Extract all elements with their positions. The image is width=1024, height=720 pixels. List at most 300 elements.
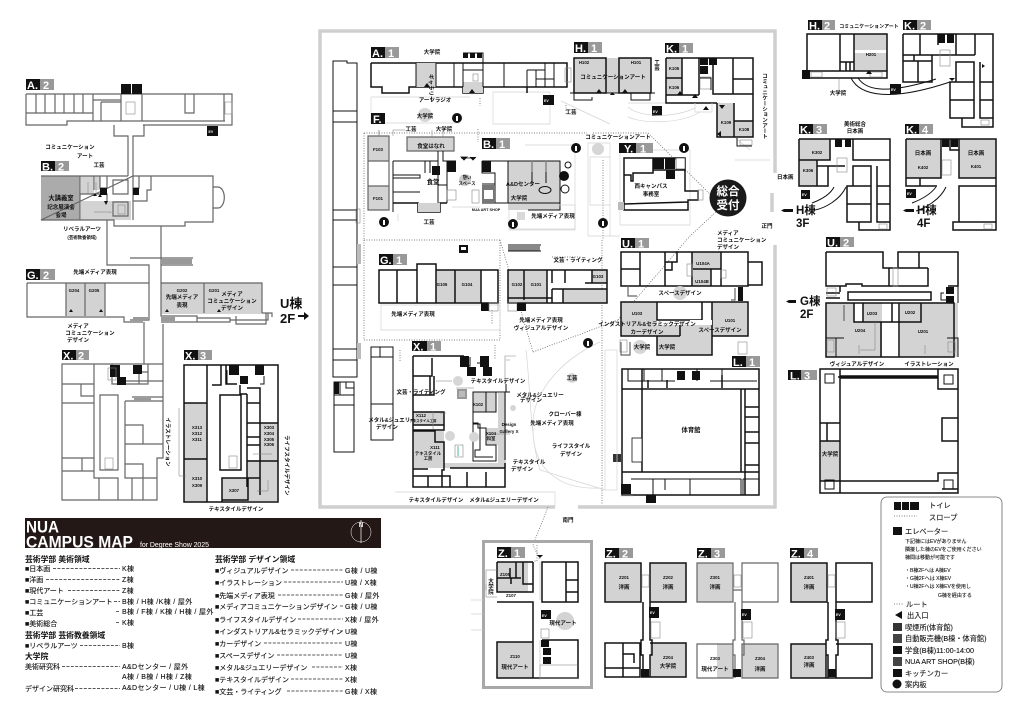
- room and department labels: EV: [542, 614, 547, 618]
- room and department labels: メディア: [67, 322, 89, 330]
- room and department labels: X307: [229, 488, 240, 493]
- floor tags: 1: [682, 44, 688, 56]
- room and department labels: ライフスタイルデザイン: [283, 435, 291, 496]
- room and department labels: H102: [579, 60, 590, 65]
- legend: design: ■先端メディア表現: [215, 591, 275, 600]
- panel: building K 4F: [906, 139, 996, 230]
- building U 1F: [620, 252, 762, 355]
- room and department labels: スペース: [458, 181, 476, 187]
- room and department labels: Z303: [710, 656, 721, 661]
- floor tags: 1: [396, 255, 402, 267]
- floor tags: K.: [904, 20, 915, 32]
- floor tags: 2: [824, 20, 830, 32]
- room and department labels: A&Dセンター: [506, 180, 540, 188]
- floor tags: Z.: [606, 548, 616, 560]
- room and department labels: X304: [264, 431, 275, 436]
- room and department labels: G205: [89, 288, 100, 293]
- room and department labels: イラストレーション: [904, 361, 954, 368]
- room and department labels: U204: [855, 328, 866, 333]
- room and department labels: G201: [209, 288, 220, 293]
- room and department labels: 3F: [796, 218, 809, 230]
- room and department labels: Z202: [663, 575, 674, 580]
- room and department labels: 洋画: [662, 583, 674, 591]
- room and department labels: G105: [437, 282, 448, 287]
- room and department labels: メディア: [221, 290, 243, 298]
- room and department labels: 体育館: [682, 425, 701, 434]
- panel: building H 2F: [802, 34, 887, 94]
- floor tags: 1: [640, 144, 646, 156]
- floor tags: X.: [185, 350, 195, 362]
- floor tags: K.: [906, 124, 917, 136]
- panel: building Z 1F frame: [471, 542, 592, 688]
- room and department labels: Z201: [619, 575, 630, 580]
- reception circle: [710, 180, 746, 216]
- room and department labels: テキスタイルデザイン: [409, 496, 464, 504]
- room and department labels: 会場: [55, 211, 67, 219]
- room and department labels: メディア: [717, 229, 739, 237]
- legend: design: G棟 / U棟: [345, 566, 378, 575]
- legend box: map key: 喫煙所(体育館): [905, 623, 953, 632]
- room and department labels: コミュニケーション: [45, 143, 95, 151]
- room and department labels: H201: [866, 52, 877, 57]
- room and department labels: テキスタイル: [415, 450, 442, 457]
- room and department labels: 洋画: [754, 665, 766, 673]
- legend: fine arts: Z棟: [122, 575, 134, 584]
- room and department labels: メタル&ジュエリーデザイン: [469, 496, 539, 504]
- legend: design: X棟: [345, 663, 357, 672]
- legend: design: ■テキスタイルデザイン: [215, 675, 289, 684]
- room and department labels: 記念展演会: [47, 203, 75, 211]
- room and department labels: 日本画: [847, 127, 864, 135]
- legend box: map key: 隣接した棟のEVをご使用ください: [905, 546, 982, 553]
- legend box: map key: ・B棟2Fへは A棟EV: [905, 567, 951, 574]
- room and department labels: Z204: [663, 655, 674, 660]
- room and department labels: U201: [918, 329, 929, 334]
- room and department labels: デザイン: [67, 336, 89, 344]
- room and department labels: X313: [192, 425, 203, 430]
- room and department labels: 表現: [176, 301, 188, 309]
- legend: fine arts: B棟 / F棟 / K棟 / H棟 / 屋外: [122, 607, 214, 616]
- room and department labels: Gallery X: [499, 429, 519, 434]
- floor tags: X.: [413, 342, 423, 354]
- room and department labels: ヴィジュアルデザイン: [514, 324, 569, 332]
- floor tags: H.: [575, 43, 586, 55]
- room and department labels: Design: [502, 422, 517, 427]
- legend: fine arts: K棟: [122, 564, 134, 573]
- room and department labels: Z107: [506, 593, 517, 598]
- legend: graduate school: [25, 651, 205, 693]
- legend box: map key: 案内板: [905, 680, 927, 689]
- room and department labels: デザイン: [511, 465, 533, 473]
- room and department labels: インダストリアル&セラミックデザイン: [598, 320, 696, 328]
- reception circle: 総合: [716, 184, 740, 198]
- room and department labels: コミュニケーションアート: [761, 73, 768, 139]
- legend: design: ■イラストレーション: [215, 579, 282, 587]
- room and department labels: EV: [653, 110, 658, 114]
- room and department labels: 大講義室: [48, 193, 74, 202]
- room and department labels: EV: [742, 613, 747, 617]
- building K 1F: [666, 58, 753, 146]
- room and department labels: 大学院: [424, 48, 441, 56]
- room and department labels: 工芸: [566, 374, 578, 382]
- room and department labels: 現代アート: [501, 664, 529, 671]
- room and department labels: 先端メディア表現: [530, 419, 574, 427]
- room and department labels: アーツラジオ: [419, 97, 451, 104]
- room and department labels: 先端メディア表現: [531, 212, 575, 220]
- room and department labels: 正門: [761, 223, 773, 230]
- panel: building K 3F: [799, 139, 890, 230]
- room and department labels: メタル&ジュエリー: [516, 391, 564, 399]
- floor tags: G.: [27, 270, 39, 282]
- panel: building X 2F: [62, 364, 163, 500]
- room and department labels: コミュニケーション: [717, 236, 767, 244]
- floor tags: 1: [749, 357, 755, 369]
- room and department labels: X303: [264, 425, 275, 430]
- panel: building L 3F: [820, 369, 958, 493]
- room and department labels: テキスタイルデザイン: [471, 377, 526, 385]
- room and department labels: 洋画: [803, 583, 815, 591]
- legend box: map key: 出入口: [907, 611, 929, 620]
- room and department labels: EV: [907, 192, 912, 196]
- floor tags: 2: [43, 270, 49, 282]
- room and department labels: スペースデザイン: [658, 289, 702, 297]
- floor tags: 1: [499, 139, 505, 151]
- floor tags: 2: [920, 20, 926, 32]
- legend: design: U棟 / X棟: [345, 578, 377, 587]
- legend box: map key: 自動販売機(B棟・体育館): [905, 634, 986, 643]
- legend: liberal arts: [25, 630, 134, 650]
- room and department labels: 食堂: [427, 177, 439, 186]
- room and department labels: U101: [725, 318, 736, 323]
- floor tags: 4: [807, 548, 814, 560]
- room and department labels: 先端メディア表現: [519, 316, 563, 324]
- room and department labels: X112: [416, 413, 427, 418]
- legend: graduate school: デザイン研究科: [25, 684, 74, 693]
- room and department labels: Z304: [755, 656, 766, 661]
- room and department labels: X104: [486, 431, 497, 436]
- room and department labels: 南門: [562, 516, 574, 524]
- room and department labels: 先端メディア: [166, 293, 199, 301]
- room and department labels: 文芸・ライティング: [553, 256, 603, 264]
- map title bar: NUA: [26, 518, 59, 536]
- kitchen car icon: [459, 245, 468, 253]
- floor tags: 3: [804, 370, 810, 382]
- gray area circles: [418, 108, 687, 442]
- room and department labels: デザイン: [221, 304, 243, 312]
- room and department labels: 4F: [917, 218, 930, 230]
- legend: liberal arts: ■リベラルアーツ: [25, 642, 78, 650]
- map title bar: N: [359, 523, 363, 529]
- legend: graduate school: 美術研究科: [25, 662, 60, 671]
- legend: design: ■カーデザイン: [215, 639, 261, 648]
- room and department labels: 工芸: [405, 125, 417, 133]
- room and department labels: K402: [918, 165, 929, 170]
- room and department labels: U103: [632, 311, 643, 316]
- room and department labels: 現代アート: [701, 666, 729, 673]
- panel: long west building: [333, 61, 393, 452]
- legend box: map key: ・G棟2Fへは X棟EV: [905, 575, 952, 582]
- room and department labels: カーデザイン: [630, 328, 664, 336]
- floor tags: U.: [827, 238, 838, 250]
- room and department labels: 2F: [280, 311, 295, 326]
- legend box: map key: スロープ: [929, 513, 958, 522]
- building X 1F: [413, 356, 516, 487]
- room and department labels: デザイン: [520, 396, 543, 404]
- room and department labels: 大学院: [417, 112, 434, 120]
- room and department labels: 和室: [487, 435, 496, 442]
- building B 1F: [393, 151, 575, 229]
- room and department labels: 工芸: [653, 59, 660, 72]
- panel: building B 2F: [41, 176, 224, 283]
- legend: design: ■文芸・ライティング: [215, 687, 282, 696]
- room and department labels: Z110: [510, 654, 520, 659]
- room and department labels: コミュニケーション: [207, 297, 257, 305]
- room and department labels: メタル&ジュエリー: [368, 416, 416, 424]
- room and department labels: NUA ART SHOP: [472, 208, 501, 212]
- room and department labels: Z403: [804, 655, 815, 660]
- floor tags: 1: [388, 48, 394, 60]
- info board icons: [379, 113, 689, 348]
- room and department labels: X111: [430, 445, 440, 450]
- room and department labels: 洋画: [709, 583, 721, 591]
- legend: fine arts: Z棟: [122, 586, 134, 595]
- room and department labels: リベラルアーツ: [63, 226, 102, 233]
- legend box: map key: G棟を経由する: [938, 592, 972, 599]
- legend: graduate school: A&Dセンター / 屋外: [122, 662, 188, 671]
- panel: building Z 4F: [791, 563, 872, 678]
- room and department labels: イラストレーション: [164, 417, 171, 467]
- floor tags: Y.: [624, 144, 633, 156]
- floor tags: [26, 20, 933, 560]
- room and department labels: (芸術教養領域): [67, 234, 97, 241]
- panel: building U 2F: [826, 252, 958, 357]
- legend: fine arts: ■工芸: [25, 608, 43, 617]
- room and department labels: U104A: [696, 261, 711, 266]
- floor tags: 3: [714, 548, 720, 560]
- legend: design: ■メタル&ジュエリーデザイン: [215, 663, 307, 672]
- floor tags: 2: [43, 80, 49, 92]
- floor tags: H.: [809, 20, 820, 32]
- room and department labels: F101: [373, 196, 384, 201]
- building G 1F: [379, 245, 607, 311]
- legend: design: X棟: [345, 675, 357, 684]
- room and department labels: 日本画: [915, 149, 932, 157]
- room and department labels: H101: [631, 60, 642, 65]
- legend: design: ■ライフスタイルデザイン: [215, 615, 296, 624]
- room and department labels: 2F: [800, 309, 813, 321]
- legend: fine arts: 芸術学部 美術領域: [25, 554, 90, 564]
- room and department labels: U203: [867, 311, 878, 316]
- room and department labels: G202: [177, 288, 188, 293]
- room and department labels: 大学院: [822, 450, 839, 458]
- room and department labels: 大学院: [487, 577, 494, 596]
- room and department labels: K401: [971, 164, 982, 169]
- panel: building K 2F: [903, 34, 993, 127]
- legend box: map key: 棟間は移動が可能です: [905, 554, 955, 561]
- room and department labels: 大学院: [634, 343, 651, 351]
- room and department labels: X311: [192, 437, 203, 442]
- legend: fine arts: ■現代アート: [25, 586, 64, 595]
- room and department labels: F103: [373, 147, 384, 152]
- legend: fine arts: ■洋画: [25, 575, 43, 584]
- legend: graduate school: 大学院: [25, 651, 49, 661]
- room and department labels: 憩い: [463, 174, 472, 180]
- room and department labels: Z105: [500, 572, 511, 577]
- legend: fine arts: ■美術総合: [25, 619, 57, 628]
- legend box: map key: トイレ: [929, 501, 951, 510]
- room and department labels: ライフスタイル: [552, 442, 591, 450]
- floor tags: B.: [483, 139, 494, 151]
- floor tags: 2: [622, 548, 628, 560]
- floor tags: 1: [638, 238, 644, 250]
- room and department labels: テキスタイル工房: [409, 418, 437, 423]
- room and department labels: EV: [802, 193, 807, 197]
- room and department labels: 事務室: [643, 190, 660, 198]
- room and department labels: 美術総合: [844, 120, 866, 128]
- room and department labels: G204: [69, 288, 80, 293]
- room and department labels: デザイン: [560, 450, 582, 458]
- room and department labels: コミュニケーションアート: [585, 133, 651, 141]
- building H 1F: [570, 58, 655, 100]
- panel: building Z 2F: [605, 563, 686, 677]
- room and department labels: U棟: [280, 296, 302, 311]
- building F and annex: [368, 130, 454, 210]
- room and department labels: G104: [462, 282, 473, 287]
- room and department labels: K306: [803, 168, 814, 173]
- floor tags: U.: [622, 238, 633, 250]
- panel: building A 2F: [26, 84, 232, 176]
- room and department labels: G棟: [800, 294, 821, 308]
- legend: design: X棟 / 屋外: [345, 615, 379, 624]
- room and department labels: U104B: [695, 279, 709, 284]
- floor tags: 2: [78, 350, 84, 362]
- legend: fine arts: B棟 / H棟 /K棟 / 屋外: [122, 597, 193, 606]
- floor tags: B.: [42, 162, 53, 174]
- room and department labels: テキスタイルデザイン: [209, 505, 264, 513]
- legend: design: G棟 / U棟: [345, 602, 378, 611]
- floor tags: K.: [666, 44, 677, 56]
- building L 1F gym: [605, 350, 759, 503]
- room and department labels: 日本画: [968, 149, 985, 157]
- room and department labels: EV: [208, 130, 214, 134]
- room and department labels: デザイン: [717, 243, 740, 251]
- floor tags: 3: [816, 124, 822, 136]
- room and department labels: デザイン: [376, 423, 399, 431]
- legend: fine arts: [25, 554, 214, 628]
- room and department labels: 洋画: [618, 583, 630, 591]
- room and department labels: X306: [264, 442, 275, 447]
- floor tags: L.: [733, 357, 743, 369]
- legend: design: U棟: [345, 639, 358, 648]
- legend: design: ■ヴィジュアルデザイン: [215, 566, 289, 575]
- legend: liberal arts: 芸術学部 芸術教養領域: [25, 630, 105, 640]
- room and department labels: ギャラリー: [427, 74, 434, 102]
- legend: design: G棟 / X棟: [345, 687, 377, 696]
- room and department labels: 工房: [424, 456, 433, 462]
- floor tags: 1: [430, 342, 436, 354]
- legend: design: U棟: [345, 627, 358, 636]
- legend box: map key: エレベーター: [905, 527, 948, 536]
- panel: main campus frame: [320, 31, 775, 560]
- room and department labels: 先端メディア表現: [391, 310, 435, 318]
- room and department labels: X102: [473, 402, 484, 407]
- panel: building G 2F: [27, 283, 272, 364]
- legend: fine arts: ■日本画: [25, 564, 50, 573]
- legend: design: ■メディアコミュニケーションデザイン: [215, 602, 338, 611]
- room and department labels: Z401: [804, 575, 815, 580]
- room and department labels: EV: [836, 613, 841, 617]
- room and department labels: EV: [891, 88, 896, 92]
- legend: design: [215, 554, 380, 696]
- floor tags: K.: [800, 124, 811, 136]
- room and department labels: Z301: [710, 575, 721, 580]
- legend: fine arts: K棟: [122, 618, 134, 627]
- EV between H and K: [628, 106, 700, 122]
- room and department labels: クローバー棟: [549, 410, 582, 418]
- room and department labels: スペースデザイン: [698, 326, 742, 334]
- room and department labels: 大学院: [660, 662, 677, 670]
- room and department labels: 食堂はなれ: [417, 142, 445, 150]
- legend: graduate school: A棟 / B棟 / H棟 / Z棟: [122, 672, 192, 681]
- room and department labels: 工芸: [423, 218, 435, 226]
- room and department labels: G103: [593, 274, 604, 279]
- room and department labels: G101: [531, 282, 542, 287]
- legend box: map key: ・U棟2Fへは X棟EVを使用し: [905, 583, 971, 590]
- room and department labels: コミュニケーション: [65, 329, 115, 337]
- map title bar: [25, 518, 381, 552]
- room and department labels: 文芸・ライティング: [396, 388, 446, 396]
- reception circle: 受付: [716, 198, 740, 212]
- legend: design: U棟: [345, 651, 358, 660]
- room and department labels: コミュニケーションアート: [839, 23, 899, 30]
- room and department labels: 現代アート: [549, 620, 577, 627]
- room and department labels: 大学院: [830, 89, 847, 97]
- room and department labels: 先端メディア表現: [73, 268, 117, 276]
- room and department labels: K106: [669, 85, 680, 90]
- floor tags: 1: [591, 43, 597, 55]
- panel: building Z 3F: [697, 563, 778, 678]
- floor tags: 2: [58, 162, 64, 174]
- room and department labels: 西キャンパス: [634, 183, 668, 190]
- legend box: map key: NUA ART SHOP(B棟): [905, 657, 975, 666]
- room and department labels: EV: [650, 611, 655, 615]
- floor tags: 2: [843, 238, 849, 250]
- room and department labels: 大学院: [511, 194, 528, 202]
- floor tags: L.: [790, 370, 800, 382]
- legend: design: ■インダストリアル&セラミックデザイン: [215, 627, 343, 636]
- floor tags: Z.: [698, 548, 708, 560]
- room and department labels: ヴィジュアルデザイン: [830, 360, 885, 368]
- room and department labels: X310: [192, 476, 203, 481]
- floor tags: 3: [200, 350, 206, 362]
- room and department labels: テキスタイル: [513, 458, 546, 466]
- room and department labels: 工芸: [565, 108, 577, 116]
- building A 1F: [371, 53, 571, 105]
- legend: liberal arts: B棟: [122, 641, 134, 650]
- room and department labels: G102: [512, 282, 523, 287]
- legend box: map key: [881, 497, 1002, 692]
- building Y 1F: [618, 158, 703, 210]
- corridor arcs and EV between H and K 2F: [851, 78, 950, 94]
- legend: graduate school: A&Dセンター / U棟 / L棟: [122, 683, 205, 692]
- floor tags: A.: [372, 48, 383, 60]
- legend box: map key: ルート: [906, 600, 928, 609]
- room and department labels: アート: [77, 153, 93, 160]
- room and department labels: X312: [192, 431, 203, 436]
- floor tags: Z.: [791, 548, 801, 560]
- floor tags: 4: [922, 124, 929, 136]
- floor tags: G.: [380, 255, 392, 267]
